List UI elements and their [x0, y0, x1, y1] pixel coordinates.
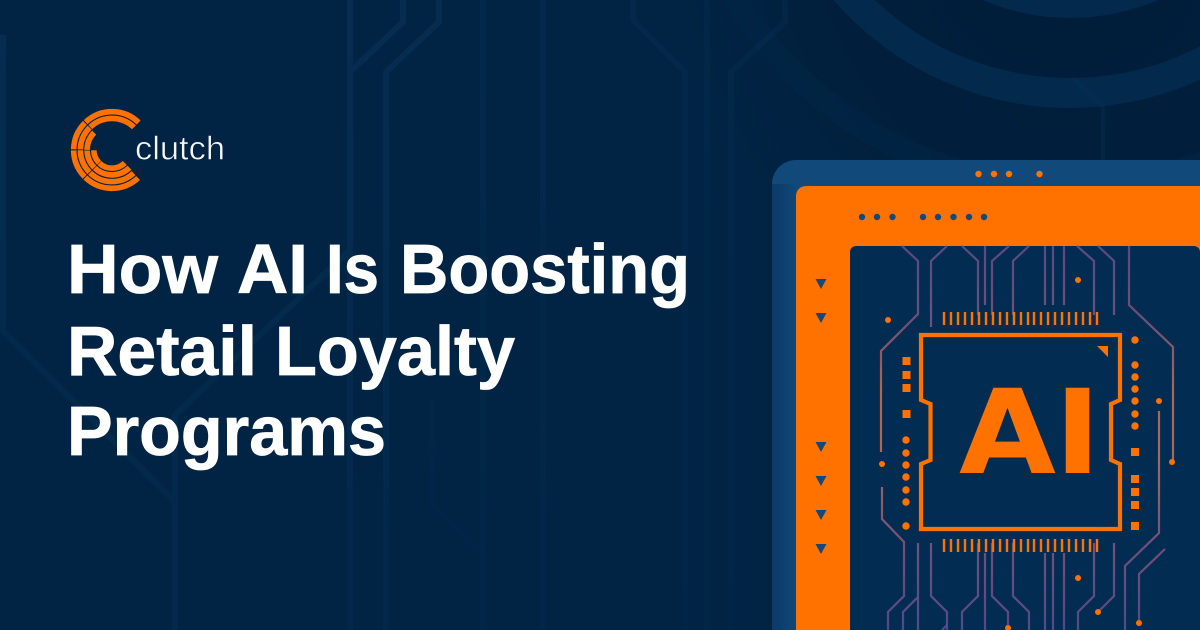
left chip pads [902, 357, 910, 530]
background: circuit traces [3, 0, 785, 630]
title: Loyalty [275, 312, 515, 390]
orange bezel [796, 186, 1200, 630]
bezel triangles [816, 279, 826, 554]
chip bottom pins [944, 539, 1097, 552]
title: How [67, 230, 219, 308]
device outer shell [772, 160, 1200, 630]
shell indicator dots [975, 171, 1043, 177]
logo wordmark: clutch [135, 130, 225, 166]
panel: device frame [772, 160, 1200, 630]
bezel blue dots [859, 214, 987, 220]
logo: clutch [58, 96, 225, 204]
title: AI [237, 230, 308, 308]
AI label: AI [959, 365, 1101, 501]
title: Boosting [400, 230, 690, 308]
chip corner marker [1097, 346, 1108, 357]
chip circuit traces [881, 246, 1173, 630]
background: concentric rings [640, 0, 1200, 330]
circuit node dots [879, 277, 1175, 630]
icon: clutch C mark [58, 96, 166, 204]
chip top pins [944, 312, 1097, 325]
right chip pads [1131, 336, 1139, 530]
title [67, 230, 690, 470]
screen [850, 246, 1200, 630]
title: Programs [67, 392, 386, 470]
chip outline [921, 335, 1120, 529]
title: Is [326, 230, 379, 308]
title: Retail [67, 312, 257, 390]
